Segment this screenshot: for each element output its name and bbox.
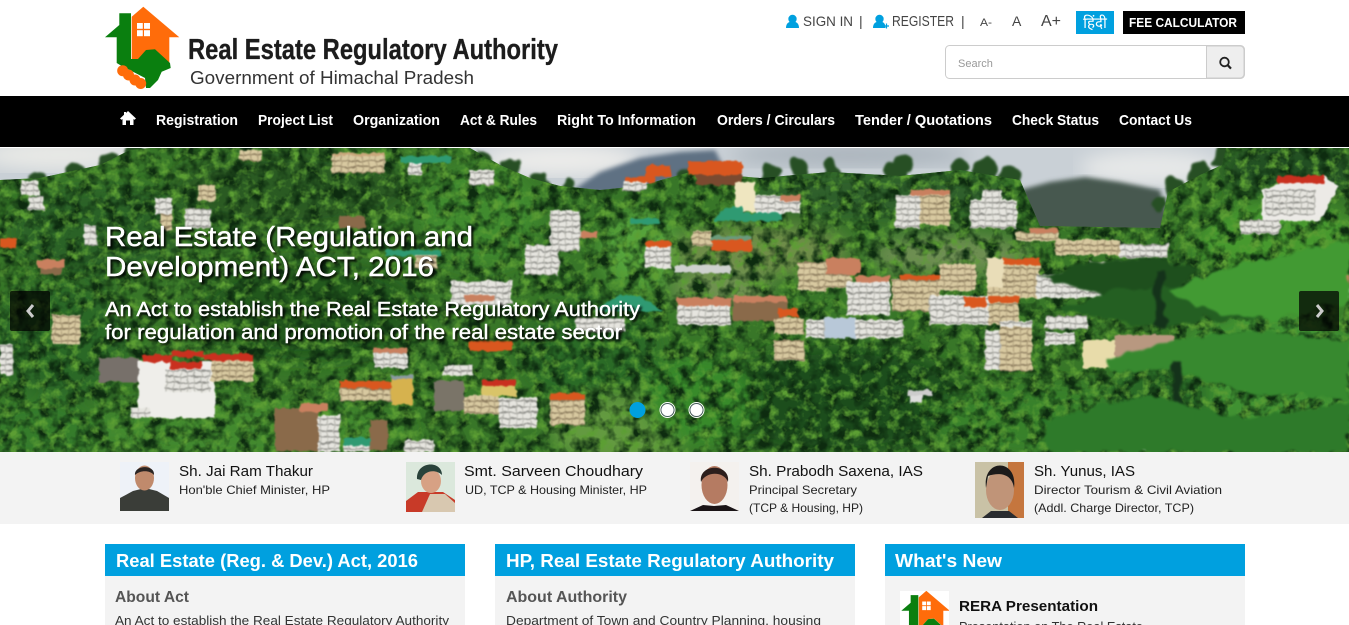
nav: tender and quotations: Tender / Quotations <box>855 112 992 129</box>
cedar trees in front <box>1040 240 1349 452</box>
official: yunus: (Addl. Charge Director, TCP) <box>1034 501 1194 515</box>
hindi button: हिंदी <box>1083 14 1108 32</box>
site title: Real Estate Regulatory Authority <box>188 34 558 66</box>
official: prabodh saxena: (TCP & Housing, HP) <box>749 501 863 515</box>
nav: check status: Check Status <box>1012 112 1099 129</box>
nav: contact us: Contact Us <box>1119 112 1192 129</box>
previous arrow <box>10 291 50 331</box>
officials strip <box>0 452 1349 524</box>
official: yunus: Director Tourism & Civil Aviation <box>1034 483 1222 497</box>
icon: sign in user <box>786 15 799 28</box>
icon: register user <box>873 15 889 28</box>
slide description <box>105 299 640 344</box>
photo: director <box>975 462 1024 518</box>
search box: Search <box>958 58 993 70</box>
fee calculator button: FEE CALCULATOR <box>1129 15 1238 30</box>
treetops on skyline <box>26 143 1237 213</box>
photo: housing minister <box>406 462 455 512</box>
next arrow <box>1299 291 1339 331</box>
buildings <box>0 150 1349 452</box>
news thumbnail <box>900 591 950 625</box>
slide heading: Real Estate (Regulation and <box>105 221 473 252</box>
official: prabodh saxena: Sh. Prabodh Saxena, IAS <box>749 463 923 480</box>
official: yunus: Sh. Yunus, IAS <box>1034 463 1135 480</box>
nav: project list: Project List <box>258 112 333 129</box>
font size small: A- <box>980 17 992 29</box>
official: sarveen choudhary: UD, TCP & Housing Minister, HP <box>465 483 647 497</box>
separator: | <box>859 13 863 29</box>
nav: act and rules: Act & Rules <box>460 112 537 129</box>
slide text <box>105 221 640 344</box>
official: jai ram thakur: Sh. Jai Ram Thakur <box>179 463 313 480</box>
panel: real estate act <box>105 544 465 625</box>
register link: REGISTER <box>892 13 954 30</box>
navigation bar <box>0 96 1349 147</box>
panel: regulatory authority <box>495 544 855 625</box>
separator: | <box>961 13 965 29</box>
search box <box>946 46 1244 78</box>
icon: home <box>120 111 136 125</box>
sign in link: SIGN IN <box>803 13 853 29</box>
photo: chief minister <box>120 462 169 511</box>
panel heading: authority: HP, Real Estate Regulatory Authority <box>506 551 834 571</box>
photo: principal secretary <box>690 462 739 511</box>
nav: organization: Organization <box>353 112 440 129</box>
nav: orders and circulars: Orders / Circulars <box>717 112 835 129</box>
hero photo: hillside town <box>0 148 1349 452</box>
hindi button <box>1076 11 1114 34</box>
panel heading: what's new: What's New <box>895 551 1003 571</box>
font size normal: A <box>1012 13 1022 29</box>
official: jai ram thakur: Hon'ble Chief Minister, HP <box>179 483 330 497</box>
official: prabodh saxena: Principal Secretary <box>749 483 857 497</box>
nav: registration: Registration <box>156 112 238 129</box>
header background <box>0 0 1349 96</box>
subheading: about act: About Act <box>115 589 190 606</box>
slide heading: Development) ACT, 2016 <box>105 251 434 282</box>
logo: house and handshake emblem <box>105 7 179 89</box>
slide heading <box>105 221 473 282</box>
panel: what's new <box>885 544 1245 625</box>
official: yunus <box>1034 463 1222 515</box>
news title: RERA Presentation <box>959 598 1098 615</box>
official: sarveen choudhary <box>464 463 647 497</box>
carousel dots <box>630 402 704 418</box>
official: prabodh saxena <box>749 463 923 515</box>
font size large: A+ <box>1041 13 1061 30</box>
panel heading: act: Real Estate (Reg. & Dev.) Act, 2016 <box>116 551 418 571</box>
site subtitle: Government of Himachal Pradesh <box>190 68 474 88</box>
fee calculator button <box>1123 11 1245 34</box>
subheading: about authority: About Authority <box>506 589 627 606</box>
official: jai ram thakur <box>179 463 330 497</box>
official: sarveen choudhary: Smt. Sarveen Choudhary <box>464 463 644 480</box>
nav: right to information: Right To Information <box>557 112 696 129</box>
sky <box>0 148 1349 238</box>
slide description: for regulation and promotion of the real estate sector <box>105 322 622 344</box>
hillside foliage <box>0 140 1349 465</box>
slide description: An Act to establish the Real Estate Regulatory Authority <box>105 299 640 321</box>
distant mountains <box>570 150 730 200</box>
